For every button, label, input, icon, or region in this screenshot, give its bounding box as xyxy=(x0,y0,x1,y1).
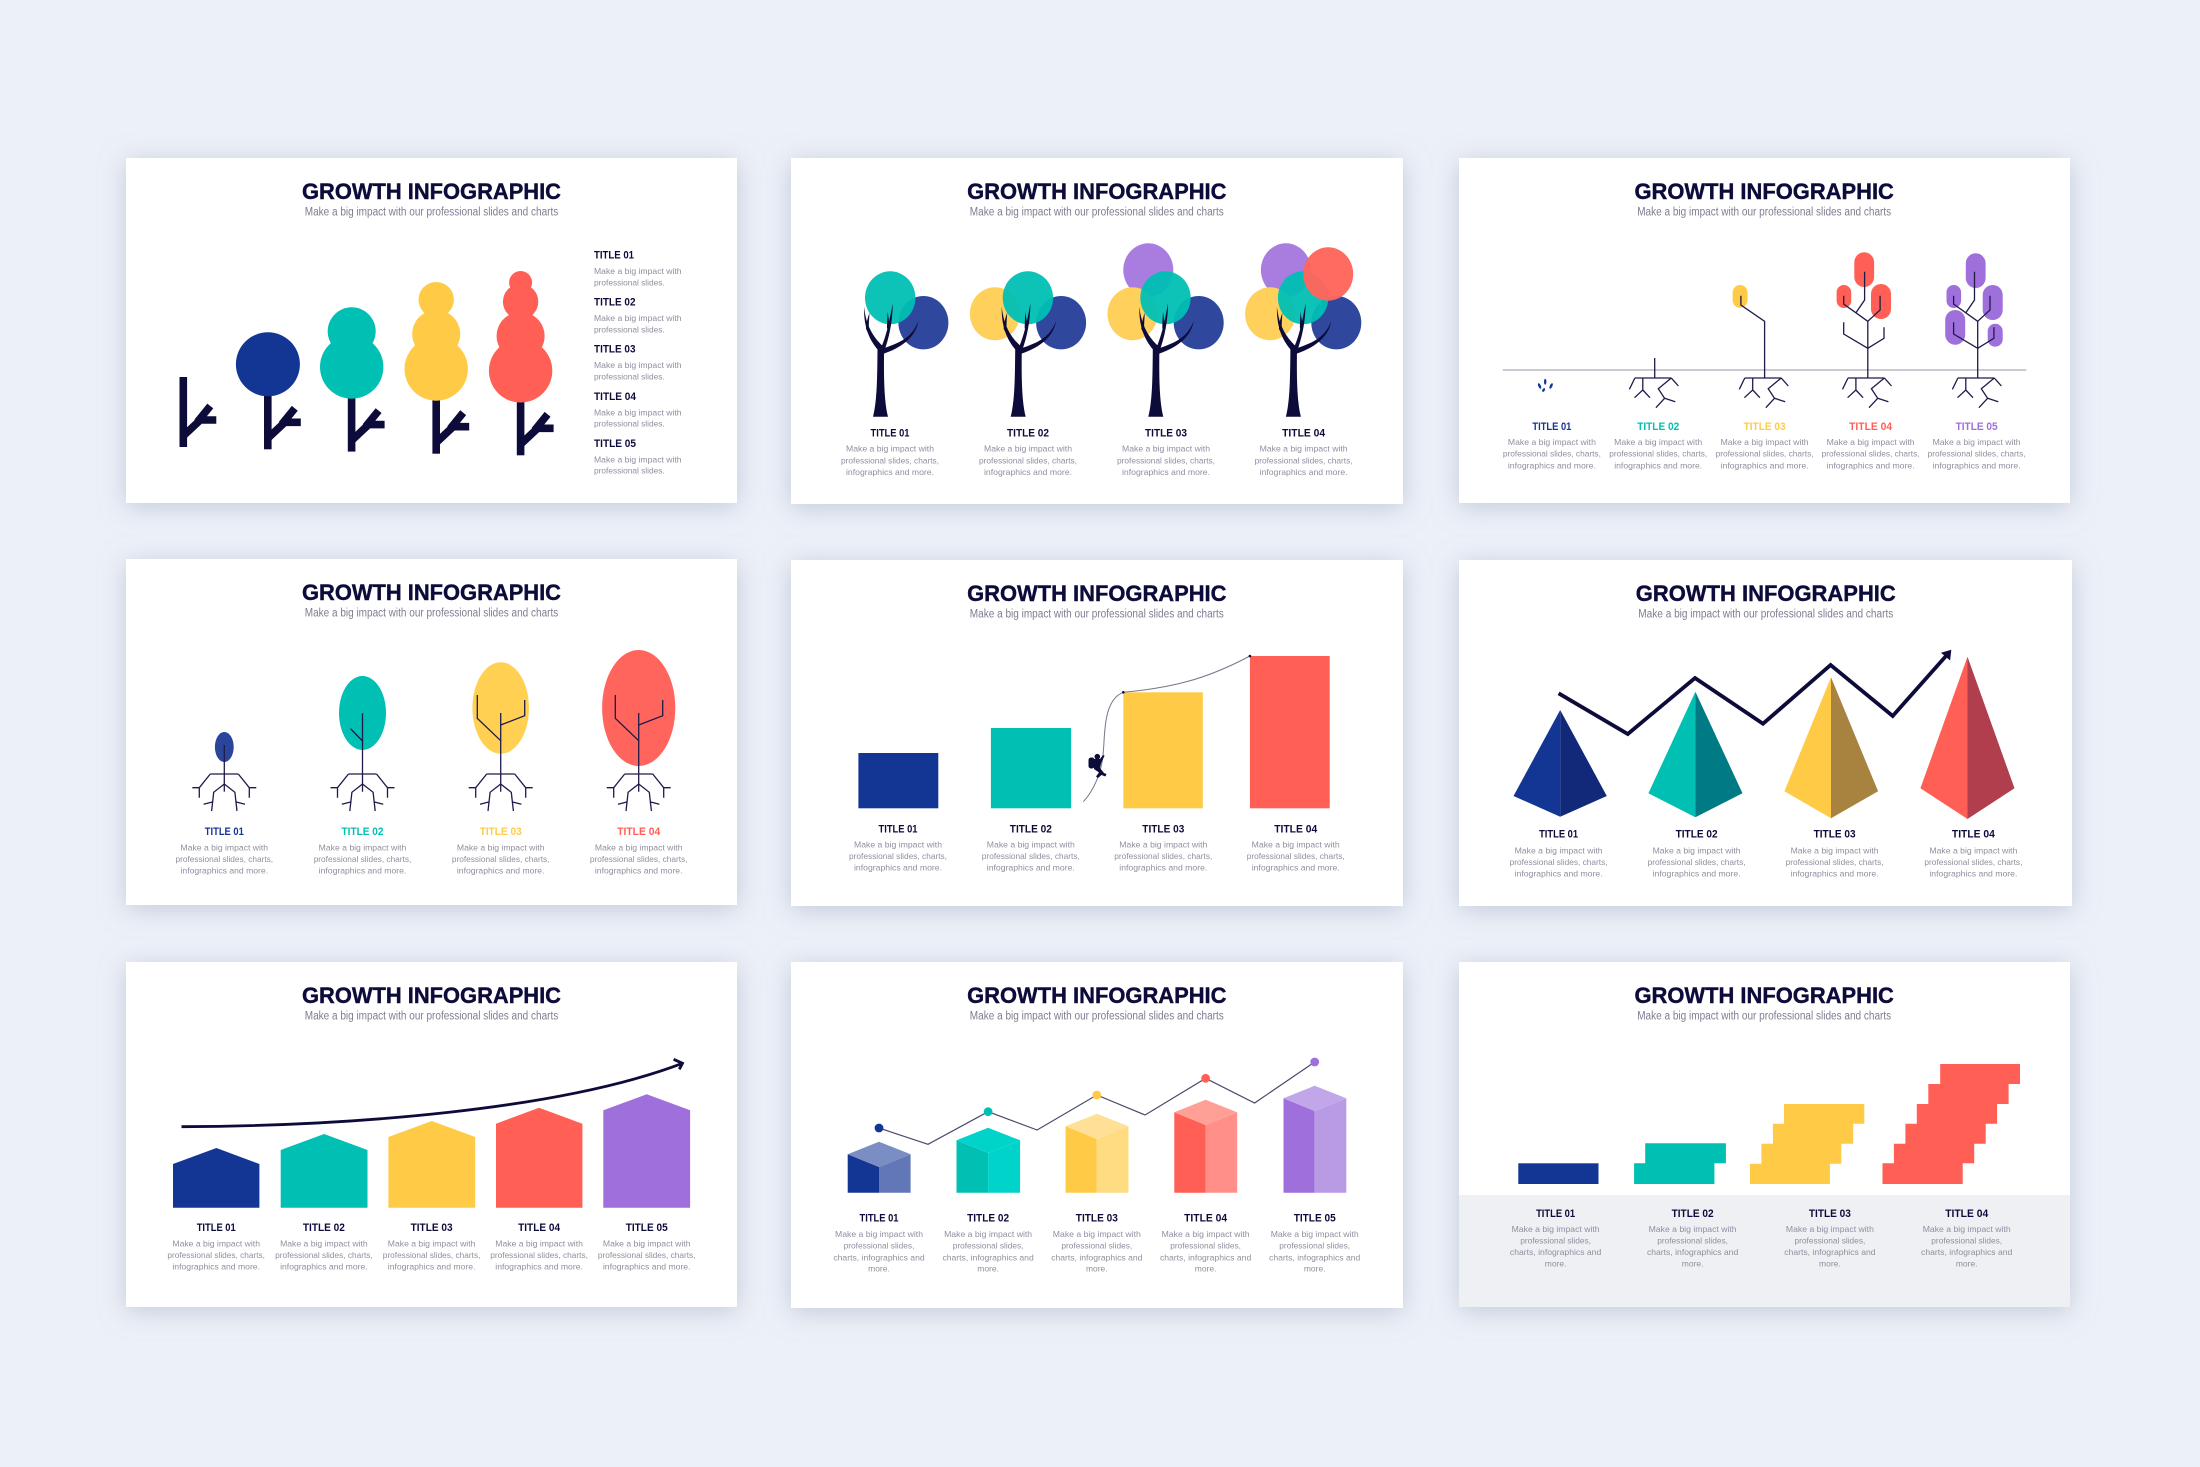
label 03: professional slides, xyxy=(1794,1236,1865,1246)
grey footer band xyxy=(1459,1195,2070,1307)
panel card xyxy=(791,962,1403,1308)
label 01: Make a big impact with xyxy=(180,842,268,852)
subheading: Make a big impact with our professional slides and charts xyxy=(1637,207,1891,219)
label 03: TITLE 03 xyxy=(480,826,522,838)
label 02: Make a big impact with xyxy=(280,1238,368,1248)
label 01: Make a big impact with xyxy=(1512,1224,1600,1234)
label 03 xyxy=(1716,421,1814,470)
panel: bars with climber xyxy=(791,560,1403,906)
label 01: professional slides, charts, xyxy=(841,455,939,465)
side list: Make a big impact with xyxy=(594,360,682,370)
icon: yellow pyramid xyxy=(1784,677,1878,818)
label 04: TITLE 04 xyxy=(1945,1208,1989,1220)
label 02: TITLE 02 xyxy=(1010,823,1052,835)
label 01 xyxy=(849,823,947,873)
side list: Make a big impact with xyxy=(594,313,682,323)
subheading: Make a big impact with our professional slides and charts xyxy=(1637,1011,1891,1023)
label 02: professional slides, charts, xyxy=(979,455,1077,465)
label 05: more. xyxy=(1304,1264,1326,1274)
label 03 xyxy=(452,826,550,876)
subheading: Make a big impact with our professional slides and charts xyxy=(305,207,558,219)
label 01: more. xyxy=(868,1264,890,1274)
label 01: infographics and more. xyxy=(854,863,942,873)
icon: coral pyramid xyxy=(1920,657,2014,819)
label 05: TITLE 05 xyxy=(1956,421,1998,433)
rope xyxy=(1083,655,1251,802)
stair 2 xyxy=(1634,1143,1726,1184)
label 04: charts, infographics and xyxy=(1921,1247,2013,1257)
side list: professional slides. xyxy=(594,324,665,334)
label 01 xyxy=(176,826,273,876)
label 04: TITLE 04 xyxy=(617,826,661,838)
heading: GROWTH INFOGRAPHIC xyxy=(302,580,561,605)
label 04: Make a big impact with xyxy=(1923,1224,2011,1234)
panel card xyxy=(126,158,737,503)
label 02: professional slides, charts, xyxy=(314,854,411,864)
label 03: professional slides, charts, xyxy=(1786,857,1884,867)
icon: tree with five leaves xyxy=(1245,243,1361,417)
label 01: charts, infographics and xyxy=(1510,1247,1601,1257)
label 04: professional slides, charts, xyxy=(1822,449,1920,459)
arrow: growth curve xyxy=(182,1059,682,1127)
label 01: Make a big impact with xyxy=(835,1229,923,1239)
label 02: TITLE 02 xyxy=(1676,829,1718,841)
label 01: Make a big impact with xyxy=(846,444,934,454)
label 05: infographics and more. xyxy=(603,1261,690,1271)
label 03: charts, infographics and xyxy=(1784,1247,1876,1257)
label 03: infographics and more. xyxy=(1119,863,1207,873)
label 03: Make a big impact with xyxy=(1053,1229,1141,1239)
label 02: TITLE 02 xyxy=(342,826,384,838)
label 03: TITLE 03 xyxy=(1142,823,1184,835)
label 03: Make a big impact with xyxy=(1119,840,1208,850)
label 02 xyxy=(1647,1208,1738,1269)
label 03 xyxy=(1051,1213,1143,1274)
icon: yellow tree xyxy=(469,662,533,811)
label 02: TITLE 02 xyxy=(303,1222,345,1234)
label 03 xyxy=(1786,829,1884,878)
label 02: Make a big impact with xyxy=(987,840,1075,850)
label 02: professional slides, xyxy=(1657,1236,1728,1246)
label 01: TITLE 01 xyxy=(878,823,918,835)
label 02: professional slides, charts, xyxy=(1609,449,1707,459)
label 05: TITLE 05 xyxy=(1294,1213,1336,1225)
label 04 xyxy=(1924,829,2022,878)
label 04: professional slides, charts, xyxy=(590,854,688,864)
label 03 xyxy=(1117,428,1215,477)
panel: pyramids with zigzag arrow xyxy=(1459,560,2072,906)
label 05: TITLE 05 xyxy=(626,1222,668,1234)
house bar chart xyxy=(173,1094,690,1208)
side list: TITLE 02 xyxy=(594,297,636,309)
icon: seed xyxy=(1537,379,1554,392)
side list: professional slides. xyxy=(594,371,665,381)
label 05 xyxy=(598,1222,696,1271)
icon: four tier coral tree xyxy=(489,271,554,455)
label 01: professional slides, charts, xyxy=(176,854,273,864)
label 03: TITLE 03 xyxy=(1145,428,1187,440)
label 01 xyxy=(833,1213,925,1274)
label 01: TITLE 01 xyxy=(860,1213,898,1225)
side list: professional slides. xyxy=(594,466,665,476)
label 03: infographics and more. xyxy=(388,1261,475,1271)
label 03: professional slides, charts, xyxy=(1114,851,1212,861)
subheading: Make a big impact with our professional slides and charts xyxy=(970,1011,1224,1023)
heading: GROWTH INFOGRAPHIC xyxy=(1634,179,1894,204)
label 01: professional slides, charts, xyxy=(1503,449,1601,459)
label 04: infographics and more. xyxy=(1260,467,1348,477)
label 04: infographics and more. xyxy=(595,866,682,876)
panel card xyxy=(1459,962,2070,1307)
label 01: TITLE 01 xyxy=(1539,829,1578,841)
label 02: TITLE 02 xyxy=(1672,1208,1714,1220)
label 03: Make a big impact with xyxy=(1721,437,1809,447)
label 03: professional slides, charts, xyxy=(452,854,550,864)
panel card xyxy=(1459,560,2072,906)
label 01: TITLE 01 xyxy=(1536,1208,1575,1220)
panel card xyxy=(1459,158,2070,503)
panel: five stage trees with side list xyxy=(126,158,737,503)
label 03: professional slides, charts, xyxy=(383,1250,480,1260)
label 04: infographics and more. xyxy=(1827,460,1915,470)
label 02: more. xyxy=(1682,1259,1703,1269)
label 04: professional slides, charts, xyxy=(1924,857,2022,867)
label 04: Make a big impact with xyxy=(495,1238,583,1248)
icon: three tier yellow tree xyxy=(404,282,469,454)
label 01: infographics and more. xyxy=(180,866,268,876)
label 03: Make a big impact with xyxy=(1786,1224,1874,1234)
icon: sprout xyxy=(180,377,216,447)
side list: TITLE 05 xyxy=(594,438,636,450)
label 04 xyxy=(590,826,688,876)
subheading: Make a big impact with our professional slides and charts xyxy=(305,1011,558,1023)
label 01: more. xyxy=(1545,1259,1566,1269)
label 01: professional slides, charts, xyxy=(849,851,947,861)
3D bar 5 xyxy=(1284,1086,1346,1193)
stair 4 xyxy=(1882,1064,2020,1184)
side list: professional slides. xyxy=(594,419,665,429)
label 05: professional slides, charts, xyxy=(1928,449,2026,459)
label 05: professional slides, xyxy=(1279,1241,1350,1251)
label 02: Make a big impact with xyxy=(1649,1224,1737,1234)
label 02: charts, infographics and xyxy=(1647,1247,1738,1257)
label 02: professional slides, charts, xyxy=(275,1250,373,1260)
label 02: infographics and more. xyxy=(987,863,1075,873)
icon: round navy tree xyxy=(236,332,301,449)
label 03 xyxy=(383,1222,480,1271)
label 02: Make a big impact with xyxy=(319,842,407,852)
3D bar 3 xyxy=(1066,1114,1128,1193)
label 05: Make a big impact with xyxy=(1271,1229,1359,1239)
label 03: Make a big impact with xyxy=(1791,845,1879,855)
label 03: more. xyxy=(1086,1264,1108,1274)
label 01 xyxy=(1503,421,1601,470)
label 04: more. xyxy=(1956,1259,1978,1269)
icon: tree with three leaves xyxy=(970,271,1086,417)
label 04: TITLE 04 xyxy=(1274,823,1318,835)
label 01: Make a big impact with xyxy=(172,1238,260,1248)
label 03: Make a big impact with xyxy=(388,1238,476,1248)
heading: GROWTH INFOGRAPHIC xyxy=(967,581,1227,606)
icon: climber xyxy=(1088,754,1106,778)
label 01: professional slides, xyxy=(844,1241,914,1251)
icon: plant with coral leaves xyxy=(1837,252,1892,408)
label 03: Make a big impact with xyxy=(1122,444,1210,454)
heading: GROWTH INFOGRAPHIC xyxy=(967,179,1227,204)
arrow: zigzag growth line xyxy=(1559,650,1951,734)
label 01: TITLE 01 xyxy=(205,826,244,838)
label 02: more. xyxy=(977,1264,999,1274)
label 01: TITLE 01 xyxy=(870,428,910,440)
label 01: Make a big impact with xyxy=(1515,845,1603,855)
label 01 xyxy=(1510,1208,1601,1269)
label 03: Make a big impact with xyxy=(457,842,545,852)
label 04: Make a big impact with xyxy=(595,842,683,852)
heading: GROWTH INFOGRAPHIC xyxy=(967,983,1227,1008)
ground line xyxy=(1503,369,2026,371)
label 04 xyxy=(1247,823,1345,873)
bar chart xyxy=(858,656,1330,808)
label 02 xyxy=(1609,421,1707,470)
label 05: Make a big impact with xyxy=(1933,437,2021,447)
label 04: TITLE 04 xyxy=(1849,421,1893,433)
label 02 xyxy=(1648,829,1746,878)
heading: GROWTH INFOGRAPHIC xyxy=(302,983,561,1008)
label 02: infographics and more. xyxy=(280,1261,368,1271)
stair 3 xyxy=(1750,1104,1864,1184)
label 01: Make a big impact with xyxy=(854,840,942,850)
label 01: professional slides, charts, xyxy=(167,1250,265,1260)
label 02: Make a big impact with xyxy=(1614,437,1702,447)
label 05 xyxy=(1928,421,2026,470)
subheading: Make a big impact with our professional slides and charts xyxy=(1638,609,1894,621)
icon: teal tree xyxy=(330,676,394,811)
label 04: infographics and more. xyxy=(1929,868,2017,878)
label 01: infographics and more. xyxy=(846,467,934,477)
panel: staircase blocks xyxy=(1459,962,2070,1307)
label 01 xyxy=(841,428,939,477)
label 01: infographics and more. xyxy=(172,1261,260,1271)
icon: two tier teal tree xyxy=(320,307,385,452)
icon: stem with one leaf xyxy=(1733,285,1788,408)
label 04: Make a big impact with xyxy=(1260,444,1348,454)
label 03: TITLE 03 xyxy=(1809,1208,1851,1220)
label 01: professional slides, xyxy=(1520,1236,1591,1246)
label 02: professional slides, charts, xyxy=(982,851,1080,861)
label 01: charts, infographics and xyxy=(833,1252,925,1262)
label 02 xyxy=(275,1222,373,1271)
side list: Make a big impact with xyxy=(594,454,682,464)
label 04: TITLE 04 xyxy=(1184,1213,1228,1225)
label 03 xyxy=(1784,1208,1876,1269)
label 01: infographics and more. xyxy=(1515,868,1603,878)
label 02: professional slides, xyxy=(953,1241,1023,1251)
label 01: Make a big impact with xyxy=(1508,437,1596,447)
side list: TITLE 04 xyxy=(594,391,637,403)
label 03: more. xyxy=(1819,1259,1841,1269)
label 02: Make a big impact with xyxy=(984,444,1072,454)
side list: TITLE 01 xyxy=(594,250,634,262)
label 04 xyxy=(1160,1213,1251,1274)
label 01: professional slides, charts, xyxy=(1510,857,1608,867)
label 03: infographics and more. xyxy=(1791,868,1879,878)
label 02: TITLE 02 xyxy=(967,1213,1009,1225)
icon: coral tree xyxy=(602,650,675,811)
label 02: Make a big impact with xyxy=(1653,845,1741,855)
panel: house shaped bars with curve arrow xyxy=(126,962,737,1307)
icon: teal pyramid xyxy=(1648,692,1742,817)
label 04: more. xyxy=(1195,1264,1216,1274)
label 02: TITLE 02 xyxy=(1007,428,1049,440)
label 01 xyxy=(167,1222,265,1271)
icon: small navy tree xyxy=(192,732,256,811)
panel card xyxy=(791,560,1403,906)
icon: navy pyramid xyxy=(1514,710,1607,817)
label 03: professional slides, xyxy=(1061,1241,1132,1251)
label 01: TITLE 01 xyxy=(1532,421,1571,433)
label 02: infographics and more. xyxy=(1653,868,1741,878)
subheading: Make a big impact with our professional slides and charts xyxy=(970,207,1224,219)
label 01: infographics and more. xyxy=(1508,460,1596,470)
label 02: TITLE 02 xyxy=(1637,421,1679,433)
label 01 xyxy=(1510,829,1608,878)
label 04: professional slides, charts, xyxy=(1255,455,1353,465)
icon: tree with four leaves xyxy=(1108,243,1224,417)
label 02 xyxy=(982,823,1080,873)
panel: balloon trees xyxy=(791,158,1403,504)
subheading: Make a big impact with our professional slides and charts xyxy=(970,609,1224,621)
label 04: professional slides, charts, xyxy=(490,1250,588,1260)
label 04: Make a big impact with xyxy=(1162,1229,1250,1239)
label 04: TITLE 04 xyxy=(518,1222,561,1234)
line chart with dots xyxy=(875,1058,1319,1144)
3D bar 4 xyxy=(1174,1100,1237,1193)
label 03: TITLE 03 xyxy=(411,1222,453,1234)
label 05: charts, infographics and xyxy=(1269,1252,1361,1262)
label 02: charts, infographics and xyxy=(942,1252,1034,1262)
icon: plant with purple leaves xyxy=(1945,253,2003,408)
label 02: professional slides, charts, xyxy=(1648,857,1746,867)
label 04: Make a big impact with xyxy=(1929,845,2018,855)
panel card xyxy=(126,559,737,905)
label 03: charts, infographics and xyxy=(1051,1252,1143,1262)
label 04: professional slides, charts, xyxy=(1247,851,1345,861)
heading: GROWTH INFOGRAPHIC xyxy=(302,179,561,204)
label 04: infographics and more. xyxy=(495,1261,583,1271)
side list: TITLE 03 xyxy=(594,344,636,356)
label 05: Make a big impact with xyxy=(603,1238,691,1248)
label 01: TITLE 01 xyxy=(197,1222,236,1234)
subheading: Make a big impact with our professional slides and charts xyxy=(305,608,558,620)
label 03: TITLE 03 xyxy=(1076,1213,1118,1225)
panel card xyxy=(126,962,737,1307)
3D bar 2 xyxy=(956,1128,1020,1193)
3D bar 1 xyxy=(848,1142,911,1193)
side list: Make a big impact with xyxy=(594,266,682,276)
side list: Make a big impact with xyxy=(594,407,682,417)
label 04: charts, infographics and xyxy=(1160,1252,1251,1262)
label 04: TITLE 04 xyxy=(1952,829,1996,841)
label 02: Make a big impact with xyxy=(944,1229,1032,1239)
label 03 xyxy=(1114,823,1212,873)
label 02: infographics and more. xyxy=(984,467,1072,477)
label 04: TITLE 04 xyxy=(1282,428,1326,440)
label 02: infographics and more. xyxy=(1614,460,1702,470)
label 03: professional slides, charts, xyxy=(1716,449,1814,459)
label 04: Make a big impact with xyxy=(1252,840,1340,850)
label 04: professional slides, xyxy=(1170,1241,1241,1251)
label 03: TITLE 03 xyxy=(1814,829,1856,841)
label 02 xyxy=(979,428,1077,477)
icon: roots with shoot xyxy=(1629,358,1678,408)
label 02 xyxy=(942,1213,1034,1274)
panel: seed to plant with roots xyxy=(1459,158,2070,503)
label 03: infographics and more. xyxy=(1122,467,1210,477)
label 03: TITLE 03 xyxy=(1744,421,1786,433)
panel: 3D bars with line xyxy=(791,962,1403,1308)
label 04 xyxy=(1255,428,1353,477)
label 03: infographics and more. xyxy=(457,866,544,876)
label 04: infographics and more. xyxy=(1252,863,1340,873)
panel: oval trees with roots xyxy=(126,559,737,905)
label 05: infographics and more. xyxy=(1933,460,2021,470)
label 03: infographics and more. xyxy=(1721,460,1809,470)
label 02 xyxy=(314,826,411,876)
stair 1 xyxy=(1518,1163,1598,1184)
label 02: infographics and more. xyxy=(319,866,406,876)
label 04 xyxy=(490,1222,588,1271)
heading: GROWTH INFOGRAPHIC xyxy=(1634,983,1894,1008)
icon: tree with two leaves xyxy=(864,271,948,417)
heading: GROWTH INFOGRAPHIC xyxy=(1636,581,1896,606)
label 05 xyxy=(1269,1213,1361,1274)
label 05: professional slides, charts, xyxy=(598,1250,696,1260)
label 04 xyxy=(1822,421,1920,470)
panel card xyxy=(791,158,1403,504)
label 03: professional slides, charts, xyxy=(1117,455,1215,465)
label 04 xyxy=(1921,1208,2013,1269)
side list: professional slides. xyxy=(594,277,665,287)
label 04: Make a big impact with xyxy=(1827,437,1915,447)
side list xyxy=(594,250,682,476)
label 04: professional slides, xyxy=(1931,1236,2002,1246)
